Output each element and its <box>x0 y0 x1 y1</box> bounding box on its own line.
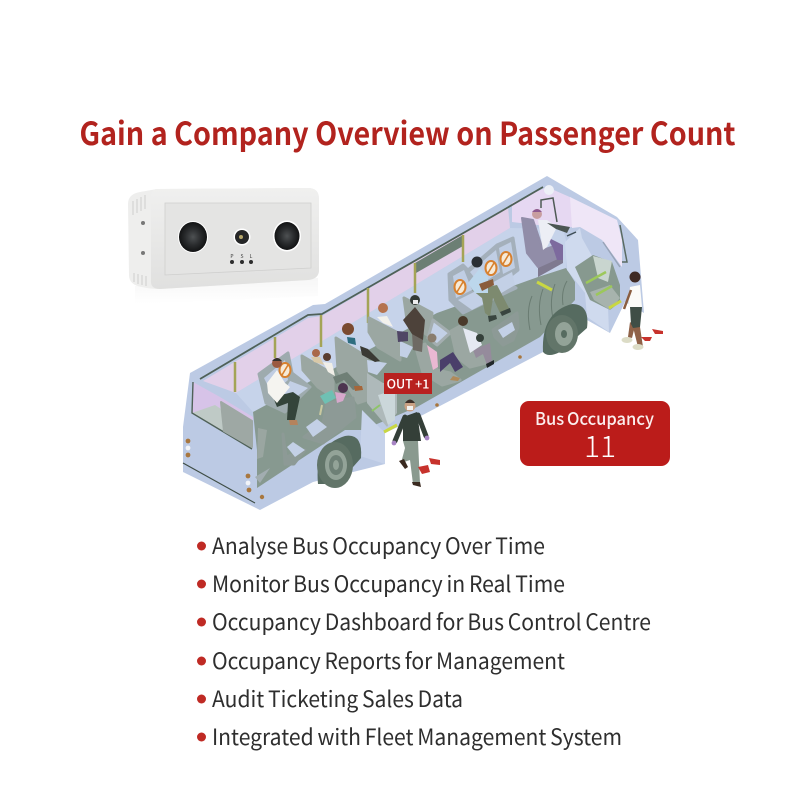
seat: white shirt <box>451 326 490 367</box>
rear door <box>360 373 397 464</box>
passenger: man in blue <box>472 285 510 317</box>
icon: red exit arrows, front <box>641 329 663 341</box>
front wheel <box>543 304 587 355</box>
seat: rear man <box>259 353 310 412</box>
seat: front row aisle <box>304 398 355 443</box>
floor ridges <box>528 281 567 330</box>
feature list <box>197 529 651 752</box>
bullet 3: Occupancy Dashboard for Bus Control Centre <box>212 605 651 637</box>
passenger: seated woman <box>342 323 354 335</box>
bus lights <box>183 355 522 503</box>
passenger exiting at rear door <box>392 400 429 487</box>
bullet 6: Integrated with Fleet Management System <box>212 720 622 752</box>
icon: people counting camera: P <box>230 253 234 260</box>
passenger: children <box>312 349 320 357</box>
bus occupancy badge: Bus Occupancy <box>535 406 654 431</box>
passenger: pink <box>428 334 436 342</box>
seat: children back <box>302 356 333 397</box>
bus illustration <box>183 176 663 510</box>
bullet 4: Occupancy Reports for Management <box>212 644 566 676</box>
icon: no-seat stickers <box>280 252 512 377</box>
window poles <box>235 235 463 392</box>
seat: near front <box>493 313 518 345</box>
seat: fourth row <box>369 318 400 360</box>
OUT +1 label: OUT +1 <box>387 374 429 392</box>
icon: red exit arrows, rear <box>418 458 440 474</box>
passenger: window man <box>378 303 388 313</box>
rear seats <box>221 402 270 483</box>
bullet 5: Audit Ticketing Sales Data <box>212 682 463 714</box>
seats <box>259 238 518 464</box>
bus windows <box>192 187 622 449</box>
bullet 2: Monitor Bus Occupancy in Real Time <box>212 567 565 599</box>
icon: people counting camera: L <box>250 253 253 260</box>
passenger: standing woman <box>412 333 423 352</box>
driver seat and driver <box>522 185 570 277</box>
interior side wall <box>236 228 566 412</box>
bus occupancy badge <box>520 401 670 466</box>
bullet 1: Analyse Bus Occupancy Over Time <box>212 529 545 561</box>
bus occupancy badge: 11 <box>584 422 616 466</box>
rear wheel <box>317 436 361 488</box>
icon: people counting camera: S <box>241 253 244 260</box>
front door and steps <box>537 225 627 332</box>
bus body <box>183 176 644 510</box>
passenger: white shirt <box>458 316 468 326</box>
seat: pink passenger <box>416 344 460 385</box>
passenger at front door <box>622 272 644 350</box>
passenger: rear man <box>273 392 300 420</box>
seat: blue row <box>449 238 518 313</box>
bus floor <box>253 268 575 488</box>
passengers <box>267 256 511 425</box>
seat: third row <box>336 338 367 403</box>
title: Gain a Company Overview on Passenger Count <box>80 109 736 155</box>
icon: people counting camera <box>128 188 319 304</box>
